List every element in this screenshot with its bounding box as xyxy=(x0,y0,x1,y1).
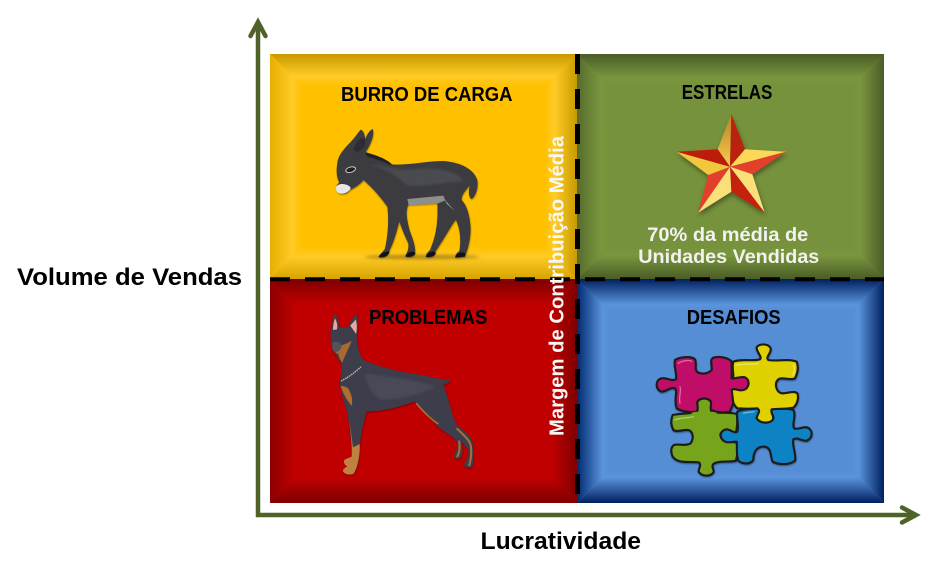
arrow: y axis xyxy=(250,22,266,517)
puzzle piece: green xyxy=(671,399,738,476)
puzzle piece: green knob xyxy=(692,399,717,418)
text: 70% da média de unidades vendidas xyxy=(638,224,819,268)
arrow: x axis xyxy=(256,508,916,522)
icon: doberman dog xyxy=(331,313,473,475)
heading: desafios: DESAFIOS xyxy=(687,307,781,329)
panel: desafios xyxy=(577,279,884,503)
text: 70% da média de unidades vendidas: 70% da média de xyxy=(647,224,808,246)
heading: problemas: PROBLEMAS xyxy=(369,307,487,329)
puzzle highlights xyxy=(675,361,794,420)
panel: problemas xyxy=(270,279,577,503)
icon: star xyxy=(677,114,786,213)
text: margem de contribuição média: Margem de Contribuição Média xyxy=(546,135,568,436)
text: 70% da média de unidades vendidas: Unidades Vendidas xyxy=(638,246,819,268)
panel: estrelas xyxy=(577,54,884,279)
panel: burro de carga xyxy=(270,54,577,279)
label: lucratividade: Lucratividade xyxy=(480,528,641,555)
heading: burro de carga: BURRO DE CARGA xyxy=(341,83,513,106)
label: volume de vendas: Volume de Vendas xyxy=(17,264,242,291)
puzzle piece: yellow xyxy=(731,344,798,423)
icon: donkey xyxy=(336,129,480,259)
icon: puzzle pieces xyxy=(657,344,812,476)
heading: estrelas: ESTRELAS xyxy=(682,82,772,104)
divider: vertical dashed line xyxy=(575,54,580,503)
puzzle piece: blue xyxy=(721,408,812,464)
divider: horizontal dashed line xyxy=(270,277,884,281)
puzzle piece: pink xyxy=(657,357,749,412)
